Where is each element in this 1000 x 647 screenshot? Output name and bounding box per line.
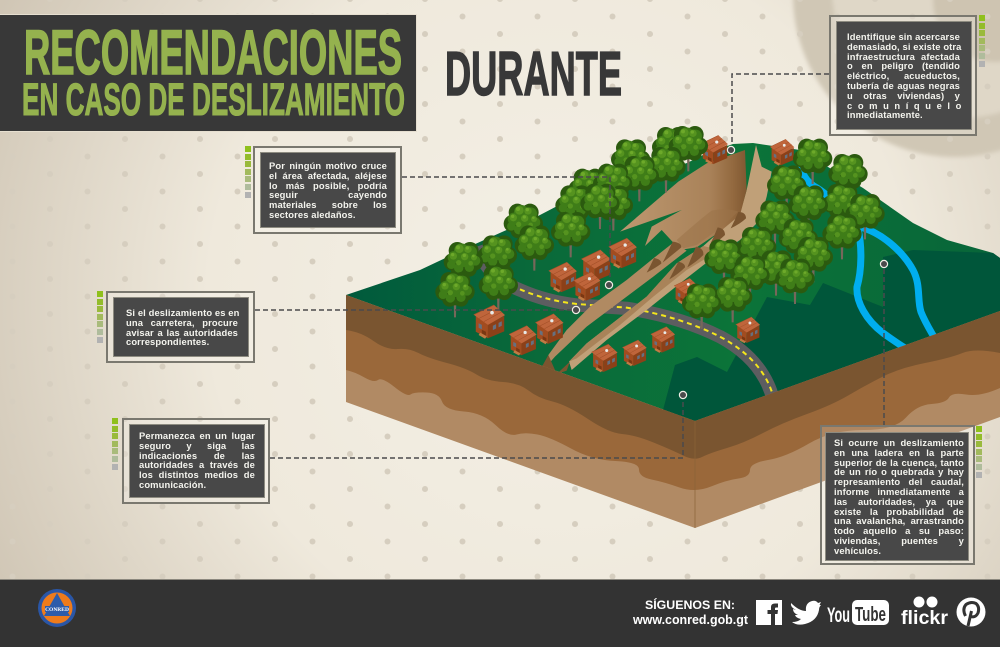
colour squares — [112, 418, 118, 470]
callout text: indicaciones de las — [139, 450, 255, 461]
callout text: vehículos. — [834, 545, 881, 556]
dark panel — [130, 425, 264, 497]
callout text: avisar a las autoridades — [126, 327, 238, 338]
houses behind — [674, 135, 794, 305]
callout text: los distintos medios de — [139, 469, 255, 480]
callout frame — [820, 425, 975, 565]
icon: youtube: Tube — [855, 604, 886, 626]
callout text: las autoridades, ya que — [834, 496, 964, 507]
callout text: existe la probabilidad de — [834, 506, 964, 517]
callout text: el área afectada, aléjese — [269, 170, 387, 181]
colour squares — [97, 291, 103, 343]
trees — [435, 126, 885, 329]
icon: flickr: flickr — [901, 608, 949, 629]
callout text — [834, 437, 964, 556]
callout text: comuníquelo — [847, 100, 967, 111]
houses front — [474, 238, 760, 372]
callout text: Por ningún motivo cruce — [269, 160, 387, 171]
icon: youtube: You — [827, 604, 850, 627]
callout text: seguir cayendo — [269, 189, 387, 200]
callout text: seguro y siga las — [139, 440, 255, 451]
icon: twitter — [791, 601, 821, 625]
callout text — [269, 160, 387, 220]
callout text: informe inmediatamente a — [834, 486, 964, 497]
dark panel — [261, 153, 395, 227]
callout text: represamiento del caudal, — [834, 476, 964, 487]
terrain block — [346, 126, 1000, 528]
leader dots — [572, 146, 888, 399]
dark land shading — [663, 250, 1000, 421]
dark panel — [114, 298, 248, 356]
colour squares — [976, 426, 982, 478]
footer bar — [0, 579, 1000, 647]
callout text: Identifique sin acercarse — [847, 31, 960, 42]
callout frame — [122, 418, 270, 504]
icon: flickr — [901, 596, 949, 629]
callout text: materiales sobre los — [269, 199, 387, 210]
callout text — [847, 31, 967, 120]
icon: facebook — [756, 600, 782, 625]
land surface — [346, 143, 1000, 421]
dark panel — [837, 22, 971, 129]
callout: lugar seguro — [112, 418, 270, 504]
colour squares — [245, 146, 251, 198]
callout frame — [253, 146, 402, 234]
callout: cruce — [245, 146, 402, 234]
callout: ladera — [820, 425, 982, 565]
callout text — [126, 307, 239, 347]
title line 1: RECOMENDACIONES — [24, 18, 402, 88]
dark panel — [826, 433, 968, 560]
callout text: todo aquello a su paso: — [834, 525, 964, 536]
landslide — [530, 145, 772, 388]
callout text — [139, 430, 255, 490]
soil layers — [346, 295, 1000, 528]
callout text: superior de la cuenca, tanto — [834, 457, 964, 468]
callout text: de un río o quebrada y hay — [834, 466, 964, 477]
callout frame — [829, 15, 977, 136]
leader lines — [255, 74, 884, 458]
callout text: infraestructura afectada — [847, 51, 960, 62]
river — [802, 162, 934, 348]
callout text: inmediatamente. — [847, 109, 923, 120]
colour squares — [979, 15, 985, 67]
callout text: eléctrico, acueductos, — [847, 70, 960, 81]
callout text: Si el deslizamiento es en — [126, 307, 239, 318]
callout text: autoridades a través de — [139, 459, 255, 470]
callout: infraestructura — [829, 15, 985, 136]
follow text — [632, 597, 749, 627]
road — [477, 247, 773, 400]
callout text: Permanezca en un lugar — [139, 430, 255, 441]
callout text: en una ladera en la parte — [834, 447, 964, 458]
title line 2: EN CASO DE DESLIZAMIENTO — [22, 74, 405, 125]
callout text: lo más posible, podría — [269, 180, 387, 191]
heading: durante: DURANTE — [445, 40, 622, 109]
logo: conred: CONRED — [45, 607, 69, 613]
icon: youtube — [827, 600, 889, 627]
title banner — [0, 14, 417, 132]
callout text: sectores aledaños. — [269, 209, 356, 220]
callout text: una carretera, procure — [126, 317, 238, 328]
callout: carretera — [97, 291, 255, 363]
callout text: Si ocurre un deslizamiento — [834, 437, 964, 448]
callout text: o en peligro (tendido — [847, 60, 960, 71]
callout text: una avalancha, arrastrando — [834, 515, 964, 526]
callout text: correspondientes. — [126, 336, 209, 347]
callout text: tubería de aguas negras — [847, 80, 960, 91]
callout text: demasiado, si existe otra — [847, 41, 962, 52]
follow text: www.conred.gob.gt — [632, 613, 749, 627]
callout text: viviendas, puentes y — [834, 535, 964, 546]
follow text: SÍGUENOS EN: — [645, 597, 735, 612]
logo: conred — [38, 589, 76, 627]
callout text: u otras viviendas) y — [847, 90, 960, 101]
callout text: comunicación. — [139, 479, 206, 490]
callout frame — [106, 291, 255, 363]
icon: pinterest — [956, 598, 986, 626]
